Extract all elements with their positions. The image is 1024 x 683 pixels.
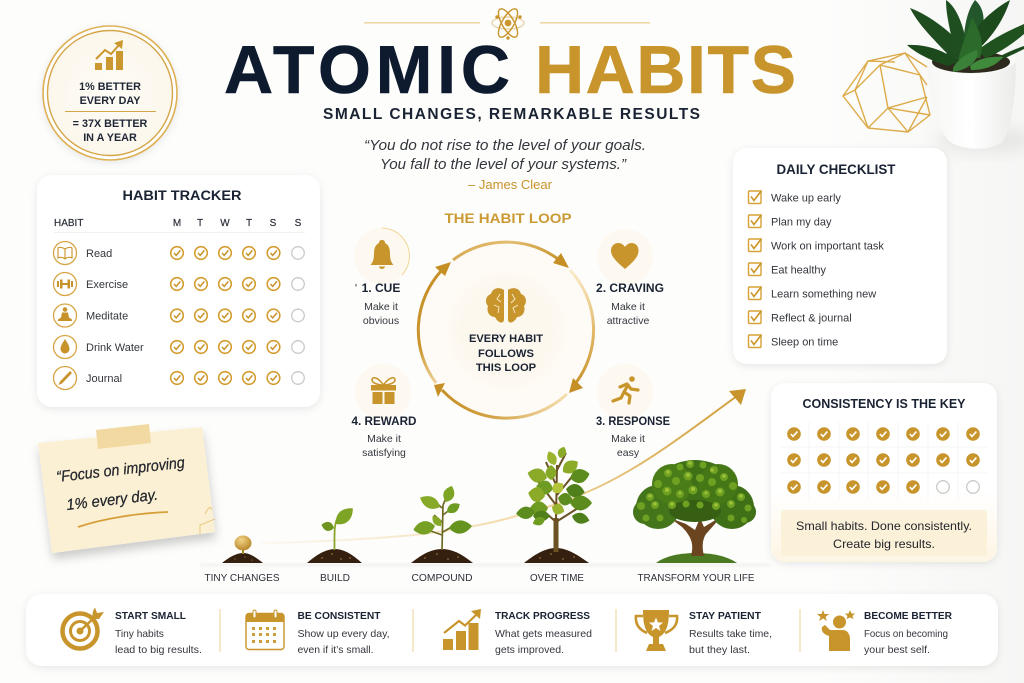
reward text [352, 414, 417, 459]
tracker header row: T [246, 218, 252, 229]
principle: become better [817, 610, 953, 656]
tracker header row: W [220, 218, 230, 229]
badge text: 1% BETTER [79, 81, 141, 93]
tracker header row: S [270, 218, 277, 229]
habit names: Read [86, 248, 112, 260]
craving text: Make it [611, 301, 645, 313]
start small text: START SMALL [115, 611, 186, 622]
arrowheads [434, 253, 583, 397]
checklist items: Plan my day [771, 216, 832, 228]
title [224, 32, 796, 108]
growth stage labels: TINY CHANGES [204, 573, 280, 584]
start small text: Tiny habits [115, 629, 164, 640]
icon: trophy [636, 610, 677, 651]
track progress text: What gets measured [495, 629, 592, 640]
icon: gift [371, 378, 396, 404]
cue text: 1. CUE [362, 281, 400, 295]
loop center text [469, 333, 543, 374]
start small text [115, 611, 202, 656]
principle: track progress [443, 609, 592, 656]
check marks grid [171, 247, 304, 384]
tracker header row: S [295, 218, 302, 229]
craving text [596, 281, 664, 327]
note text [56, 454, 186, 514]
icon: person with stars [817, 610, 855, 651]
checklist heading: DAILY CHECKLIST [776, 162, 896, 177]
craving text: attractive [607, 315, 649, 327]
growth stage labels: BUILD [320, 573, 350, 584]
icon: heart [611, 243, 638, 269]
checklist items: Eat healthy [771, 264, 827, 276]
start small text: lead to big results. [115, 645, 202, 656]
growth stage: small tree [516, 445, 592, 563]
reward text: satisfying [362, 447, 406, 459]
consistency message: Small habits. Done consistently. [796, 519, 972, 533]
badge text: IN A YEAR [83, 132, 137, 144]
icon: bell [370, 240, 394, 269]
panel: daily checklist [733, 148, 947, 364]
consistency message [781, 510, 987, 556]
tracker header row: M [173, 218, 181, 229]
principle: start small [62, 608, 202, 656]
stay patient text: Results take time, [689, 629, 772, 640]
badge text: = 37X BETTER [73, 118, 148, 130]
checklist items: Reflect & journal [771, 312, 852, 324]
decor: potted plant [907, 0, 1024, 152]
subtitle: SMALL CHANGES, REMARKABLE RESULTS [323, 106, 700, 123]
response text: 3. RESPONSE [596, 416, 670, 428]
consistency dots [787, 427, 980, 494]
track progress text: TRACK PROGRESS [495, 611, 590, 622]
habit names: Meditate [86, 310, 128, 322]
panel: habit tracker [37, 175, 320, 407]
growth stage: sprout [307, 504, 362, 563]
checkboxes [748, 190, 762, 348]
checklist items: Learn something new [771, 288, 876, 300]
growth stage labels: TRANSFORM YOUR LIFE [638, 573, 755, 584]
growth stage: young plant [411, 484, 473, 563]
tape [96, 424, 151, 449]
loop step: cue [354, 228, 410, 327]
loop step: craving [596, 229, 664, 327]
tracker header row [54, 218, 302, 229]
response text: easy [617, 447, 640, 459]
cue text [362, 281, 400, 327]
stay patient text: STAY PATIENT [689, 611, 762, 622]
habit icons [54, 242, 76, 390]
habit names: Journal [86, 373, 122, 385]
icon: calendar [246, 610, 284, 650]
badge text: EVERY DAY [80, 95, 141, 107]
icon: target [62, 608, 104, 648]
consistency message: Create big results. [833, 537, 935, 551]
note text: “Focus on improving [56, 454, 186, 486]
reward text: Make it [367, 433, 401, 445]
become better text [864, 611, 953, 656]
loop center text: FOLLOWS [478, 348, 534, 360]
checklist items [771, 192, 884, 348]
tracker heading: HABIT TRACKER [122, 188, 242, 204]
ground line [200, 563, 770, 567]
note underline [78, 512, 168, 527]
loop center text: THIS LOOP [476, 362, 537, 374]
habit names: Drink Water [86, 342, 144, 354]
icon: runner [613, 376, 638, 403]
habit loop ring [418, 242, 594, 418]
response text [596, 416, 670, 459]
consistency heading: CONSISTENCY IS THE KEY [802, 397, 966, 411]
become better text: Focus on becoming [864, 629, 948, 640]
habit names [86, 248, 144, 385]
quote [364, 137, 646, 192]
atom ornament [364, 6, 650, 40]
track progress text: gets improved. [495, 645, 564, 656]
title: HABITS [535, 32, 796, 108]
craving text: 2. CRAVING [596, 281, 664, 295]
checklist items: Work on important task [771, 240, 884, 252]
checklist items: Sleep on time [771, 336, 838, 348]
panel: principles bar [26, 594, 998, 666]
tracker header row: HABIT [54, 218, 83, 229]
principle: stay patient [636, 610, 772, 656]
cue text: obvious [363, 315, 399, 327]
growth curve arrow [262, 389, 746, 543]
quote: “You do not rise to the level of your goals. [364, 137, 646, 154]
growth stage labels [204, 573, 755, 584]
be consistent text: even if it’s small. [298, 645, 374, 656]
growth stage labels: OVER TIME [530, 573, 584, 584]
icon: growth chart [95, 40, 123, 70]
be consistent text: BE CONSISTENT [298, 611, 381, 622]
principle: be consistent [246, 610, 390, 656]
be consistent text [298, 611, 390, 656]
growth stage labels: COMPOUND [412, 573, 472, 584]
badge text [73, 81, 148, 144]
quote: – James Clear [468, 177, 553, 192]
decor: gold geometric sphere [843, 53, 930, 132]
icon: chart [443, 609, 481, 650]
be consistent text: Show up every day, [298, 629, 390, 640]
stay patient text [689, 611, 772, 656]
response text: Make it [611, 433, 645, 445]
sticky note [38, 424, 215, 553]
tracker header row: T [197, 218, 203, 229]
title: ATOMIC [224, 32, 510, 108]
growth stage: seed [222, 536, 263, 563]
habit loop heading: THE HABIT LOOP [444, 211, 572, 227]
loop center text: EVERY HABIT [469, 333, 543, 345]
note text: 1% every day. [66, 487, 159, 514]
checklist items: Wake up early [771, 192, 841, 204]
become better text: your best self. [864, 645, 930, 656]
icon: brain [486, 288, 526, 323]
cue text: Make it [364, 301, 398, 313]
loop step: response [596, 364, 670, 459]
growth stage: full tree [633, 460, 756, 563]
badge: 1% better every day [43, 26, 177, 160]
quote: You fall to the level of your systems.” [380, 156, 627, 173]
habit names: Exercise [86, 279, 128, 291]
reward text: 4. REWARD [352, 414, 417, 428]
loop step: reward [352, 364, 417, 459]
panel: consistency is the key [771, 383, 997, 562]
stay patient text: but they last. [689, 645, 750, 656]
track progress text [495, 611, 592, 656]
become better text: BECOME BETTER [864, 611, 953, 622]
